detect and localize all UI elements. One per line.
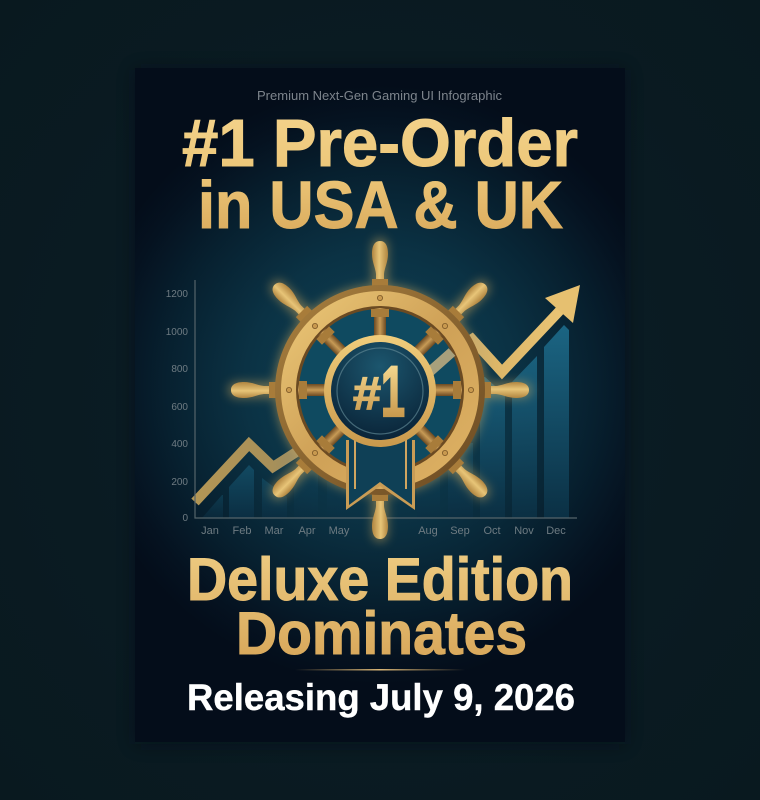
y axis labels: 1000	[166, 327, 188, 338]
x axis labels: Jan	[201, 525, 219, 537]
wheel spokes	[298, 308, 462, 454]
title: in USA & UK	[198, 168, 563, 243]
panel shadow	[135, 70, 625, 744]
bar chart	[202, 325, 569, 518]
title: #1 Pre-Order	[182, 106, 578, 181]
y axis labels: 400	[171, 439, 188, 450]
growth arrow	[195, 285, 580, 502]
x axis labels: Sep	[450, 525, 470, 537]
ribbon	[346, 440, 415, 510]
y axis labels: 200	[171, 477, 188, 488]
y axis labels: 600	[171, 402, 188, 413]
y axis labels: 1200	[166, 289, 188, 300]
wheel glow	[228, 238, 532, 542]
rim rivets	[286, 295, 474, 456]
heading: deluxe edition: Dominates	[236, 600, 527, 667]
release date: Releasing July 9, 2026	[187, 677, 575, 718]
y axis labels	[166, 289, 188, 524]
wheel handles	[231, 241, 529, 539]
x axis labels: May	[329, 525, 350, 537]
divider	[295, 669, 465, 670]
x axis labels: Mar	[265, 525, 284, 537]
heading: deluxe edition	[187, 546, 573, 667]
x axis labels: Apr	[298, 525, 316, 537]
y axis labels: 0	[182, 513, 188, 524]
x axis labels: Oct	[483, 525, 501, 537]
y axis labels: 800	[171, 364, 188, 375]
wheel rim	[275, 285, 485, 495]
x axis labels: Feb	[233, 525, 251, 537]
title	[182, 106, 578, 243]
x axis labels: Aug	[418, 525, 438, 537]
chart	[166, 280, 580, 537]
hub text: 1	[381, 353, 405, 432]
x axis labels: Dec	[546, 525, 566, 537]
x axis labels	[201, 525, 566, 537]
axes	[195, 280, 577, 518]
hub medallion	[324, 335, 436, 447]
poster panel	[135, 68, 625, 742]
hub text	[353, 353, 405, 432]
arrow seen through wheel	[425, 352, 452, 376]
x axis labels: Nov	[514, 525, 534, 537]
ship wheel	[228, 238, 532, 542]
subtitle: Premium Next-Gen Gaming UI Infographic	[257, 88, 502, 103]
hub text: #	[353, 367, 381, 419]
heading: deluxe edition: Deluxe Edition	[187, 546, 573, 613]
